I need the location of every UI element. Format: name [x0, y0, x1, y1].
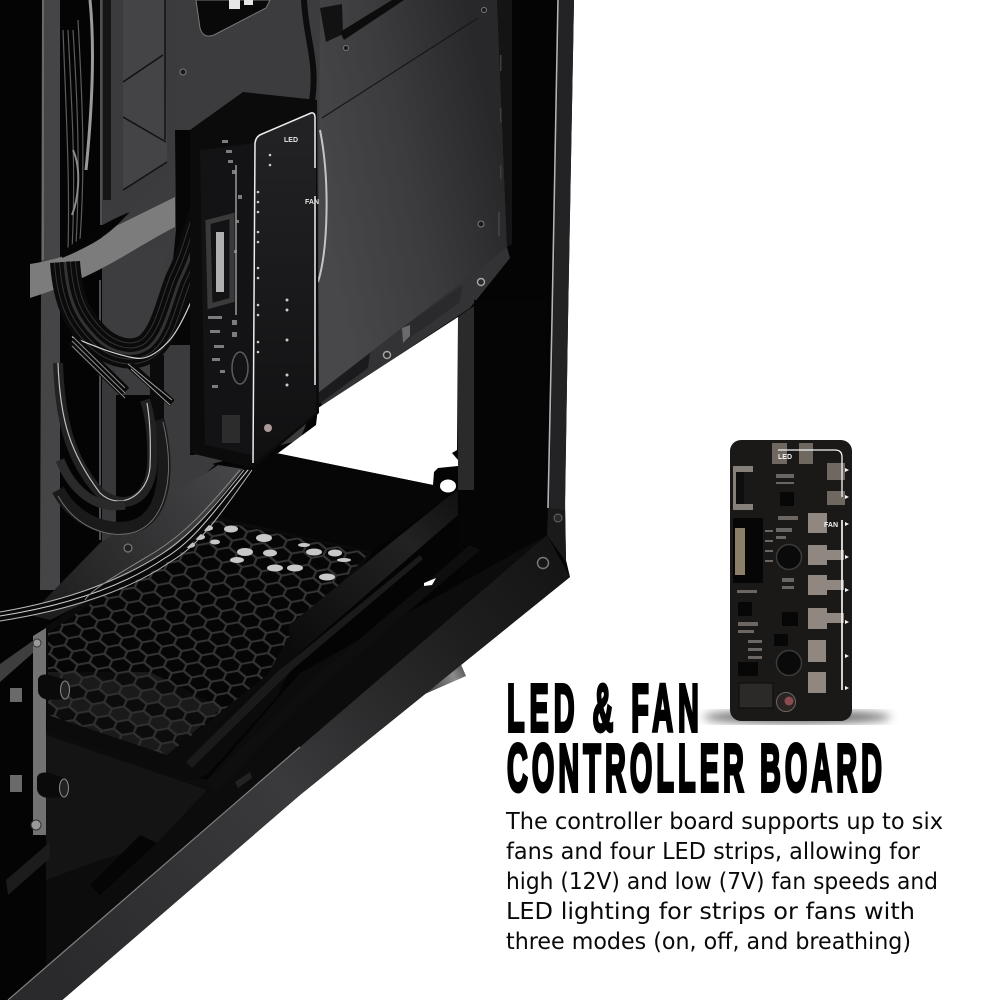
knob one: [38, 674, 68, 700]
floor ridge: [90, 835, 157, 895]
corner bracket bolt: [554, 514, 562, 522]
corner bracket: [547, 508, 566, 562]
case photo: [0, 0, 574, 1000]
description text: [505, 809, 943, 955]
bracket tabs: [10, 688, 22, 792]
tray frame: [44, 516, 372, 780]
top dark rib: [340, 0, 404, 40]
SATA housing: [208, 216, 232, 306]
pillar outer strip: [549, 0, 574, 510]
window openings: [229, 0, 253, 9]
exposed PCB side: [200, 143, 255, 455]
title line 1: LED & FAN: [507, 670, 699, 745]
lower right column: [130, 345, 215, 540]
FAN label: FAN: [305, 199, 319, 206]
diagonal brace: [30, 465, 250, 620]
case body silhouette: [0, 0, 574, 1000]
pillar light edge: [548, 0, 558, 508]
knob two: [37, 772, 66, 798]
outer cable: [58, 420, 164, 528]
fan connectors: [808, 513, 844, 693]
case foot: [412, 660, 466, 698]
gray cable strap: [30, 197, 175, 298]
shadow beside the board: [165, 130, 195, 455]
knob one face: [60, 681, 70, 699]
PCB components: [208, 140, 242, 388]
LED bracket line: [778, 450, 842, 497]
FAN label: FAN: [824, 522, 838, 529]
loose flat wires: [72, 336, 172, 405]
panel bolts: [180, 8, 486, 227]
top window: [196, 0, 270, 36]
capacitor circle: [232, 352, 248, 384]
ribbon streaks behind strap: [63, 0, 93, 250]
capacitor red mark: [784, 696, 794, 706]
inner pillar face: [458, 306, 474, 490]
brace bolt: [124, 544, 132, 552]
top cable: [304, 0, 314, 102]
left vertical strip: [40, 0, 60, 590]
white cut-out through the case: [262, 317, 458, 485]
floor lower shade: [46, 735, 207, 880]
honeycomb panel: [44, 516, 372, 780]
tray back plate: [96, 453, 448, 600]
board casing: [190, 92, 319, 468]
panel right dark band: [497, 0, 512, 247]
band recess left: [318, 353, 370, 405]
wire loop behind board: [318, 130, 327, 282]
title line 2: CONTROLLER BOARD: [507, 730, 882, 805]
rail upper edge: [8, 747, 300, 1000]
board body: [730, 440, 852, 721]
capacitor top: [264, 424, 272, 432]
bundled black cables: [58, 363, 168, 534]
front clear cover: [253, 113, 316, 463]
LED label: LED: [284, 137, 298, 144]
band highlight: [402, 325, 410, 343]
controller board product shot: [730, 440, 852, 721]
ribbon cable: [65, 175, 217, 358]
lower gray bay: [104, 248, 165, 352]
pillar shade: [458, 300, 546, 600]
cover white edge: [253, 113, 315, 463]
strap shadow: [62, 212, 130, 258]
column behind loop: [102, 345, 116, 560]
description text: three modes (on, off, and breathing): [506, 929, 911, 955]
FAN bracket line: [841, 520, 843, 690]
bracket strip: [33, 628, 46, 835]
SATA connector interior: [736, 472, 744, 504]
white mounting hole: [440, 480, 456, 492]
knob two face: [60, 779, 68, 797]
rail bolt: [538, 558, 548, 568]
middle cable: [60, 460, 125, 506]
small component clusters: [737, 474, 798, 659]
inductor: [222, 415, 240, 443]
tray side wall: [289, 490, 458, 660]
column slot: [150, 355, 164, 475]
description text: high (12V) and low (7V) fan speeds and: [506, 869, 938, 895]
capacitor: [776, 692, 796, 712]
chips: [738, 492, 798, 676]
mounting circles: [776, 544, 802, 676]
LED connectors: [772, 443, 845, 505]
strip highlight: [42, 0, 44, 260]
column gap: [103, 0, 111, 200]
band recess right: [402, 285, 462, 343]
lower left tab: [6, 842, 50, 895]
description text: LED lighting for strips or fans with: [506, 899, 915, 925]
inset plate: [123, 0, 167, 190]
floor rail: [8, 535, 570, 1000]
LED label: LED: [778, 454, 792, 461]
right panel face: [318, 0, 507, 393]
inner cable: [58, 363, 152, 502]
silver expansion bracket: [0, 628, 70, 895]
perforation: [48, 520, 369, 755]
title: [507, 670, 882, 805]
channel light line: [100, 0, 101, 540]
arrow markers: [845, 468, 849, 690]
description text: fans and four LED strips, allowing for: [506, 839, 921, 865]
SATA connector: [216, 232, 224, 292]
product shadow: [703, 710, 891, 724]
cable tie: [320, 4, 343, 42]
PCB inner vertical line: [235, 165, 237, 315]
SATA power connector: [733, 466, 753, 510]
description text: The controller board supports up to six: [505, 809, 943, 835]
back panel: [100, 0, 507, 470]
ribbon light edge: [72, 280, 200, 358]
panel bottom band: [318, 247, 510, 406]
light showing through holes: [183, 525, 351, 580]
upper left bar: [0, 640, 34, 682]
inductor: [739, 683, 773, 708]
gray frame column: [105, 0, 178, 214]
data connector: [733, 518, 763, 583]
loop shadow: [116, 395, 150, 510]
cover pin dots: [257, 154, 288, 386]
data pins: [735, 528, 745, 575]
floor panel: [46, 535, 547, 990]
plate shadow edges: [123, 0, 167, 190]
panel side slots: [498, 55, 502, 236]
mesh holes: [48, 672, 222, 755]
cable channel: [60, 0, 102, 560]
installed controller board: [190, 92, 319, 468]
panel crease: [322, 18, 478, 118]
band bolts: [384, 278, 484, 358]
thin wires crossing the tray: [0, 470, 252, 621]
bracket bolts: [33, 639, 41, 647]
mounting rails: [186, 545, 480, 792]
